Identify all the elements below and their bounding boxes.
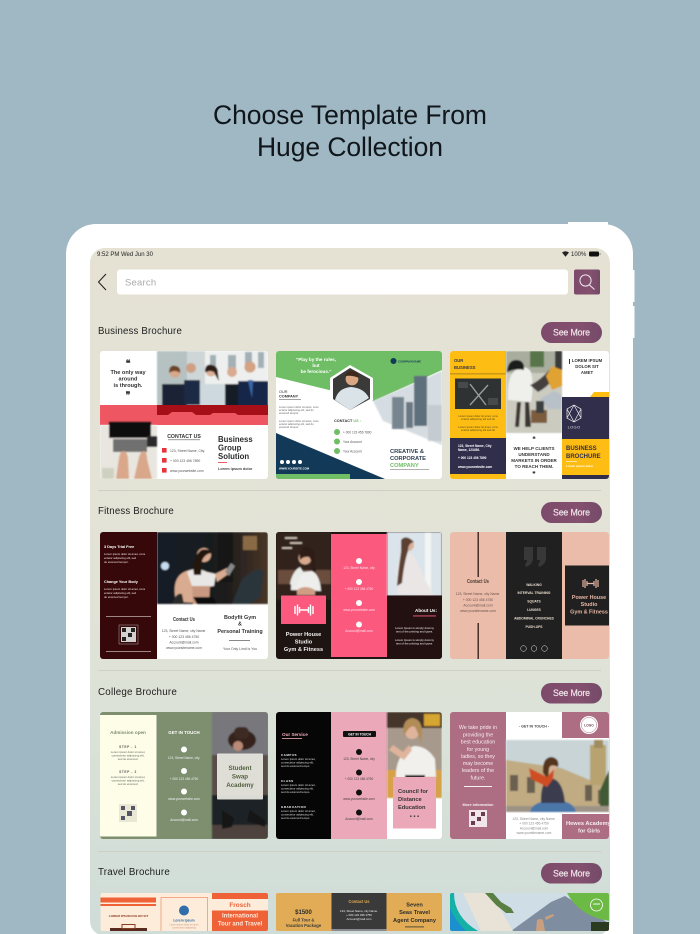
green contact column: 123, Street Name, city. [168, 756, 200, 760]
dark about block: Lorem Ipsum is simply dummy [395, 626, 435, 630]
yellow column [450, 351, 506, 479]
title panel: International [222, 914, 258, 920]
agency text [393, 902, 437, 927]
cream column: sed do eiusmod. [118, 757, 138, 761]
section heading: fitness: Fitness Brochure [98, 506, 174, 517]
dark about block: text of the printing and types. [396, 630, 433, 634]
status bar: 9:52 PM [97, 252, 119, 258]
yellow text: Lorem ipsum dolor sit amet, cons [458, 414, 498, 418]
framed panel: consectetur adipiscing [172, 926, 196, 930]
pink contact column: www.yourwebsite.com [343, 797, 375, 801]
card: gym peach and black [450, 532, 609, 659]
photo: student with glasses [387, 712, 442, 798]
academy label [217, 754, 263, 800]
text: we help clients: ❞ [532, 471, 536, 478]
text: quote: ❝ [126, 358, 131, 368]
academy label: Student [228, 765, 252, 772]
pink contact column: + 000 123 456 4750 [345, 587, 373, 591]
text: contact us: + 000 123 456 4750 [169, 635, 199, 639]
dark studio tile: Gym & Fitness [570, 610, 608, 616]
agency text: Agent Company [393, 918, 437, 924]
text: our company: eiusmod tempor. [279, 425, 299, 429]
text: lorem ipsum heading: LOREM IPSUM [572, 358, 603, 363]
photo: woman on treadmill [157, 532, 268, 604]
logo: COMPANYNAME [398, 360, 421, 364]
badge text: LOGO [593, 903, 600, 906]
black services column: sed do eiusmod tempo. [281, 764, 310, 768]
navy address block [450, 438, 506, 474]
mauve statement column: We take pride in [459, 725, 497, 731]
address: www.yoursitename.com [517, 831, 552, 835]
black services column: CAMPUS [281, 753, 297, 757]
green contact column: www.yourwebsite.com [168, 797, 200, 801]
navy address block: Name, 123456. [458, 448, 480, 452]
cream column: Lorem ipsum dolor sit amet, [111, 775, 145, 779]
green strip [276, 474, 350, 479]
cream column: STEP - 2 [119, 770, 137, 774]
cream column: Lorem ipsum dolor sit amet, [111, 750, 145, 754]
black services column: consectetur adipiscing elit, [281, 812, 314, 816]
green contact column: + 000 123 456 4750 [170, 777, 198, 781]
black services column [276, 712, 331, 839]
text: our company: ectetur adipiscing elit, sed do [279, 422, 314, 426]
text: our company: ectetur adipiscing elit, sed do [279, 408, 314, 412]
yellow text: ectetur adipiscing elit sed do [461, 428, 495, 432]
text: lorem ipsum heading: AMET [581, 370, 593, 375]
black workout column: SQUATS [527, 600, 542, 604]
pink contact column [331, 534, 387, 657]
yellow brochure block: Lorem ipsum dolor [566, 464, 594, 468]
section heading: college: College Brochure [98, 687, 177, 698]
black workout column: PUSH-UPS [525, 625, 543, 629]
black workout column [506, 532, 562, 659]
navy shape [276, 433, 385, 479]
pink label [393, 777, 436, 828]
mauve statement column: leaders of the [462, 768, 494, 774]
photo: student reading [506, 740, 609, 812]
text: slogan: be ferocious." [301, 369, 331, 374]
cream column: STEP - 1 [119, 745, 137, 749]
section heading: business: Business Brochure [98, 326, 182, 337]
peach contact column: + 000 123 456 4750 [463, 598, 493, 602]
card: seven seas travel [276, 893, 442, 931]
maroon column: Change Your Body [104, 580, 139, 584]
back arrow [98, 274, 106, 290]
photo: business team [157, 351, 268, 411]
price text: Vacation Package [286, 923, 322, 928]
mauve statement column: future. [470, 776, 486, 782]
navy address block: + 000 123 456 7890 [458, 456, 487, 460]
text: contact us: Account@mail.com [169, 640, 199, 644]
text: we help clients [512, 436, 557, 474]
framed panel: Lorem Ipsum [173, 918, 195, 922]
title panel: Frosch [229, 902, 251, 909]
text: slogan [296, 357, 336, 374]
card: hewes academy [450, 712, 612, 839]
device frame [66, 222, 634, 934]
black services column: Our Service [282, 732, 308, 737]
text: business group solution [218, 435, 253, 471]
dark contact column [332, 893, 386, 931]
yellow text [458, 414, 498, 432]
pink contact column: 123, Street Name, city [343, 757, 375, 761]
pink contact column: Account@mail.com [345, 817, 373, 821]
status bar: 100% [571, 252, 587, 258]
text: quote [110, 359, 146, 395]
cream column [100, 715, 156, 836]
text: slogan: "Play by the rules, [296, 357, 336, 362]
maroon column: ectetur adipiscing elit, sed [104, 556, 137, 560]
text: business group solution: Business [218, 435, 253, 444]
search button [574, 270, 600, 294]
dots and website [279, 460, 309, 470]
dark contact column: Contact Us [348, 899, 370, 904]
mauve statement column [450, 712, 506, 839]
mauve statement column: ladies, so they [461, 754, 495, 760]
cream column: sed do eiusmod. [118, 782, 138, 786]
text: power house studio [284, 632, 323, 653]
mauve statement column: More information [462, 803, 494, 807]
button: see more travel [541, 863, 602, 884]
maroon column: 3 Days Trial Free [104, 545, 134, 549]
navy address block: www.yourwebsite.com [457, 465, 492, 469]
text: contact: Your Account [343, 440, 362, 444]
text: bodyfit gym: Bodyfit Gym [224, 615, 256, 621]
black services column: Lorem ipsum dolor sit amet, [281, 783, 316, 787]
dark about block: text of the printing and types. [396, 642, 433, 646]
dark contact column: Account@mail.com [347, 917, 372, 921]
black workout column: WALKING [526, 583, 542, 587]
maroon column: ectetur adipiscing elit, sed [104, 591, 137, 595]
get in touch: - GET IN TOUCH - [519, 724, 550, 728]
peach contact column: Contact Us [467, 579, 489, 585]
title: Choose Template From [213, 100, 487, 130]
button: see more travel: See More [553, 868, 590, 878]
text: contact: Your Account [343, 450, 362, 454]
orange bars: LOREM IPSUM DOLOR SIT [109, 914, 148, 918]
hexagon photo [330, 365, 373, 413]
text: our company: eiusmod tempor. [279, 411, 299, 415]
title panel [212, 893, 268, 931]
text: bodyfit gym: & [238, 622, 242, 628]
text: business group solution: Group [218, 444, 242, 452]
navy address block: 123, Street Name, City [458, 444, 492, 448]
text: creative corporate company: CREATIVE & [390, 449, 424, 455]
title: Huge Collection [257, 132, 443, 162]
text: we help clients: ❝ [532, 436, 536, 443]
text: power house studio: Power House [286, 632, 321, 638]
pink dumbbell tile [281, 596, 326, 624]
card: mountain travel [450, 893, 610, 931]
pink contact column [331, 712, 387, 839]
red band [100, 405, 268, 425]
text: lorem ipsum heading [569, 359, 602, 374]
mauve statement column: providing the [463, 732, 493, 738]
photo: seminar [506, 351, 562, 433]
yellow text: Lorem ipsum dolor sit amet, cons [458, 425, 498, 429]
photo: woman with towel [276, 532, 331, 600]
green shape [276, 351, 442, 401]
card: our business [450, 351, 609, 479]
framed panel [161, 898, 208, 934]
yellow brochure block [562, 439, 609, 479]
black services column: sed do eiusmod tempo. [281, 816, 310, 820]
dots and website: WWW.YOURSITE.COM [279, 466, 310, 470]
pink contact column: Account@mail.com [345, 629, 373, 633]
black services column: GRADUATION [281, 805, 306, 809]
text: we help clients: UNDERSTAND [518, 452, 550, 457]
pink label: Education [398, 805, 426, 811]
maroon column [100, 532, 157, 659]
logo tile: LOGO [584, 724, 594, 728]
card: bodyfit gym [100, 532, 268, 659]
qr code [119, 625, 138, 644]
text: lorem ipsum heading: DOLOR SIT [575, 364, 599, 369]
peach contact column: 123, Street Name, city Name. [456, 592, 500, 596]
icon: suitcase [110, 924, 147, 932]
text: quote: ❞ [126, 390, 131, 400]
card: creative corporate company [276, 351, 442, 479]
peach contact column [456, 532, 500, 659]
text: contact us: 123, Street Name, city Name. [162, 629, 206, 633]
yellow brochure block: BUSINESS [566, 446, 597, 452]
yellow column: OUR [454, 358, 463, 363]
photo: laptop [100, 422, 157, 479]
maroon column: do eiusmod tempor. [104, 560, 129, 564]
hewes academy label: for Girls [578, 828, 600, 834]
dark about block: About Us: [415, 608, 437, 613]
text: our company [279, 390, 319, 429]
dark contact column: 123, Street Name, city Name. [340, 909, 378, 913]
maroon column: do eiusmod tempor. [104, 595, 129, 599]
photo: meeting table [455, 378, 501, 409]
card: business group solution [100, 351, 268, 479]
status bar: Wed Jun 30 [121, 252, 154, 258]
card: power house studio [276, 532, 442, 659]
text: our company: OUR [279, 390, 288, 394]
card: student swap academy [100, 712, 268, 839]
dark contact column: + 000 123 456 4750 [346, 913, 372, 917]
pink contact column: 123, Street Name, city [343, 566, 375, 570]
address: + 000 123 456 4750 [519, 822, 549, 826]
dividers [98, 490, 601, 852]
academy label: Swap [232, 774, 248, 780]
academy label: Academy [226, 782, 254, 789]
text: contact: CONTACT US : [334, 419, 361, 423]
text: contact us: 123, Street Name, City. [170, 449, 205, 453]
text: slogan: but [312, 363, 320, 368]
photo: woman with hat [212, 712, 268, 839]
text: contact us: www.yoursitename.com [166, 646, 202, 650]
text: quote: around [119, 376, 138, 382]
text: bodyfit gym [217, 615, 263, 651]
hewes academy label: Hewes Academy [566, 821, 612, 827]
text: our company: Lorem ipsum dolor sit amet, cons [279, 419, 319, 423]
button: see more fitness [541, 502, 602, 523]
text: contact us: Contact Us [173, 617, 195, 623]
status bar [97, 251, 600, 258]
text: contact: + 000 123 456 7890 [343, 430, 372, 434]
logo tile [562, 712, 609, 738]
black services column: Lorem ipsum dolor sit amet, [281, 809, 316, 813]
pink label: Council for [398, 789, 429, 795]
price text [286, 910, 322, 928]
peach contact column: Account@mail.com [463, 604, 493, 608]
button: see more business: See More [553, 328, 590, 338]
address: Account@mail.com [520, 826, 548, 830]
text: contact [334, 419, 372, 454]
green contact column [168, 730, 200, 822]
pink label: • • • [410, 814, 419, 820]
cream column: consectetur adipiscing elit, [112, 778, 145, 782]
black services column: CLASS [281, 779, 294, 783]
title panel: Tour and Travel [218, 922, 262, 928]
title [213, 100, 487, 162]
yellow tab [590, 392, 609, 397]
peach contact column: www.yoursitename.com [460, 609, 496, 613]
text: we help clients: WE HELP CLIENTS [514, 446, 554, 451]
hewes academy label [562, 814, 612, 839]
text: power house studio: Studio [295, 640, 313, 646]
button: see more college [541, 683, 602, 704]
text: we help clients: MARKETS IN ORDER [511, 458, 557, 463]
agency text: Seven [406, 902, 423, 908]
green contact column: GET IN TOUCH [168, 730, 200, 735]
section heading: travel: Travel Brochure [98, 867, 170, 878]
black workout column: ABDOMINAL CRUNCHES [514, 616, 555, 620]
black services column: Lorem ipsum dolor sit amet, [281, 757, 316, 761]
text: creative corporate company: COMPANY [390, 463, 419, 469]
dark about block [387, 596, 442, 659]
logo [390, 358, 421, 364]
black workout column: INTERVAL TRAINING [518, 591, 551, 595]
black services column: consectetur adipiscing elit, [281, 786, 314, 790]
text: bodyfit gym: Personal Training [217, 629, 263, 635]
text: contact us: www.yourwebsite.com [170, 469, 204, 473]
navy logo block: LOGO [568, 424, 580, 430]
button: see more business [541, 322, 602, 343]
pink contact column: www.yourwebsite.com [343, 608, 375, 612]
search field: Search [125, 278, 156, 288]
text: bodyfit gym: Your Only Limit Is You [223, 647, 257, 651]
dark about block: Lorem Ipsum is simply dummy [395, 638, 435, 642]
mauve statement column: best education [461, 740, 495, 746]
yellow text: ectetur adipiscing elit sed do [461, 417, 495, 421]
text: creative corporate company [390, 449, 429, 470]
mauve statement column: may become [463, 761, 493, 767]
text: creative corporate company: CORPORATE [390, 456, 426, 462]
text: contact us: CONTACT US [167, 434, 201, 440]
address [512, 817, 556, 835]
pink contact column: GET IN TOUCH [348, 732, 372, 736]
dark studio tile: Studio [581, 602, 598, 608]
text: quote: The only way [110, 370, 146, 376]
app screen [90, 248, 610, 934]
cream column: Admission open [110, 730, 146, 735]
text: quote: is through. [114, 383, 143, 389]
price text: Full Tour & [293, 918, 314, 922]
dark studio tile [565, 566, 609, 626]
agency text: Seas Travel [399, 910, 430, 916]
card: council for distance education [276, 712, 442, 839]
mauve statement column: for young [467, 747, 489, 753]
text: contact us [162, 434, 205, 473]
search field [117, 270, 568, 294]
green contact column: Account@mail.com [170, 818, 198, 822]
card: frosch travel [100, 893, 268, 934]
maroon column: Lorem ipsum dolor sit amet, cons [104, 587, 146, 591]
button: see more college: See More [553, 688, 590, 698]
yellow column: BUSINESS [454, 365, 476, 370]
yellow brochure block: BROCHURE [566, 454, 601, 460]
photo: woman sitting [387, 532, 442, 596]
navy logo block [562, 397, 609, 439]
price text: $1500 [295, 910, 313, 916]
cream column: consectetur adipiscing elit, [112, 754, 145, 758]
black services column: sed do eiusmod tempo. [281, 790, 310, 794]
text: contact us [162, 617, 206, 650]
orange bars [100, 898, 156, 918]
black services column: consectetur adipiscing elit, [281, 760, 314, 764]
text: business group solution: Solution [218, 452, 249, 461]
button: see more fitness: See More [553, 508, 590, 518]
text: we help clients: TO REACH THEM. [515, 464, 553, 469]
text: business group solution: Lorem ipsum dolor [218, 467, 253, 471]
pink label: Distance [398, 797, 422, 803]
pink contact column: + 000 123 456 4750 [345, 777, 373, 781]
text: power house studio: Gym & Fitness [284, 647, 323, 653]
photo: city [373, 371, 442, 445]
text: our company: Lorem ipsum dolor sit amet, cons [279, 405, 319, 409]
framed panel: Lorem ipsum dolor sit amet [170, 924, 199, 926]
address: 123, Street Name, city Name. [512, 817, 556, 821]
dark studio tile: Power House [572, 595, 606, 601]
text: our company: COMPANY [279, 394, 299, 398]
maroon column: Lorem ipsum dolor sit amet, cons [104, 552, 146, 556]
black workout column: LUNGES [527, 608, 542, 612]
text: contact us: + 000 123 456 7890 [170, 459, 200, 463]
